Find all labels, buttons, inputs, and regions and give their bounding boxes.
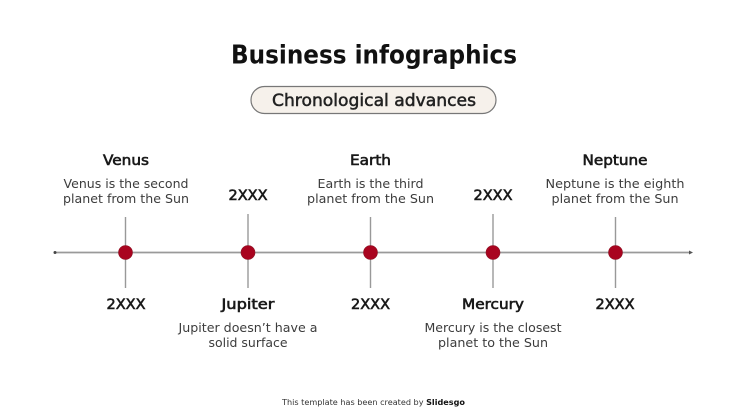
milestone: Neptune: Neptune is the eighth [546,177,684,191]
milestone: Neptune [546,153,684,313]
axis arrow head [689,250,693,254]
milestone: Venus: planet from the Sun [63,192,189,206]
milestone: Mercury [424,188,562,350]
milestone: Jupiter: Jupiter [220,297,275,313]
milestone: Mercury: Mercury is the closest [424,321,562,335]
footer credit: This template has been created by Slidesgo [281,398,466,407]
milestone: Jupiter: Jupiter doesn’t have a [177,321,318,335]
milestone: Mercury: Mercury [462,297,524,313]
milestone: Jupiter: solid surface [208,336,288,350]
milestone: Earth [307,153,434,313]
axis start dot [54,251,56,254]
title: Business infographics [231,40,517,70]
milestone: Neptune: 2XXX [596,297,635,313]
milestone: Mercury: planet to the Sun [438,336,548,350]
milestone: Neptune: planet from the Sun [552,192,678,206]
milestone: Mercury: 2XXX [474,188,513,204]
milestone: Earth: 2XXX [351,297,390,313]
axis line [55,252,690,254]
milestone: Venus: 2XXX [106,297,146,313]
milestone: Venus: Venus is the second [64,177,188,191]
milestone: Venus: Venus [103,153,149,169]
subtitle pill [251,86,496,114]
timeline [54,153,693,350]
milestone: Venus [63,153,189,313]
milestone: Neptune: Neptune [582,153,648,169]
subtitle pill: Chronological advances [272,91,476,110]
milestone: Jupiter: 2XXX [228,188,268,204]
milestone: Earth: planet from the Sun [307,192,434,206]
milestone: Earth: Earth is the third [318,177,424,191]
milestone: Jupiter [177,188,318,350]
milestone: Earth: Earth [350,153,391,169]
